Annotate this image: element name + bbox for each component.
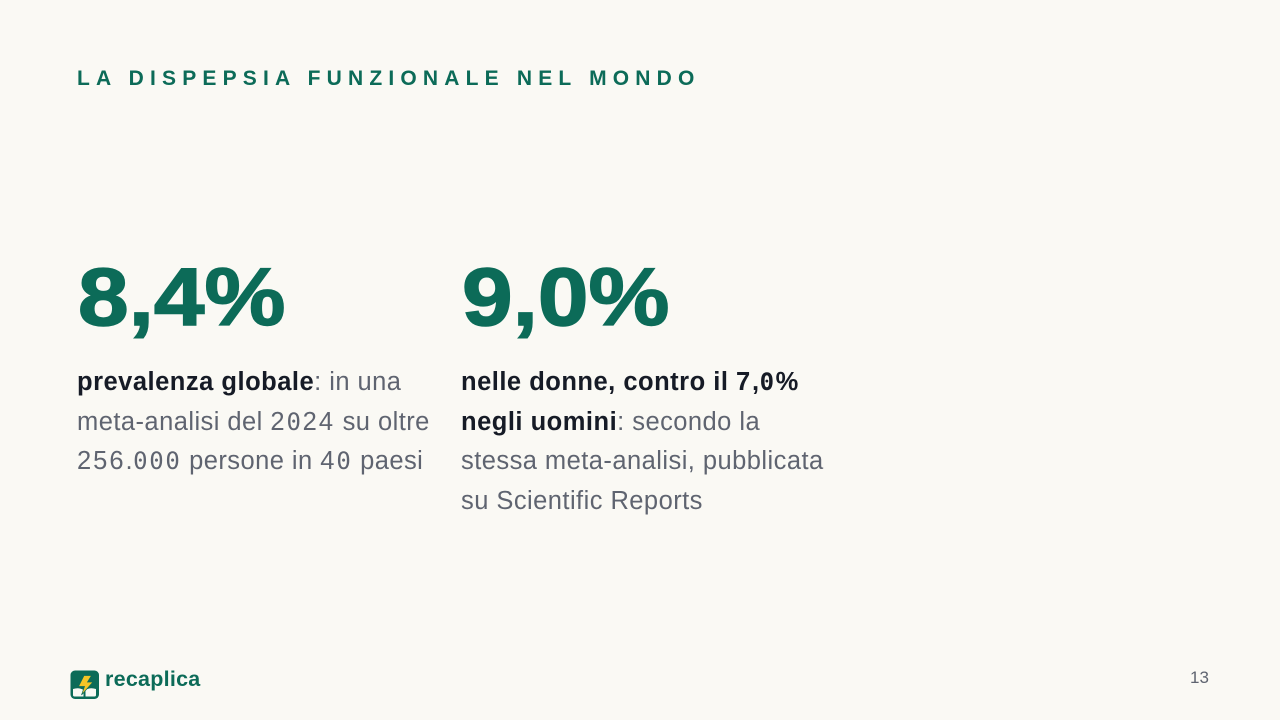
page number: 13 bbox=[1190, 668, 1209, 687]
description: global prevalence bbox=[77, 368, 430, 475]
stat value: 8,4%: 8,4% bbox=[78, 252, 285, 343]
icon: lightning bolt over open book bbox=[70, 670, 99, 699]
description: women versus men: su Scientific Reports bbox=[461, 487, 703, 515]
description: global prevalence: 256.000 persone in 40 paesi bbox=[77, 447, 423, 475]
description: global prevalence: meta-analisi del 2024 su oltre bbox=[77, 408, 430, 436]
description: women versus men: stessa meta-analisi, pubblicata bbox=[461, 447, 824, 475]
description: global prevalence: prevalenza globale: in una bbox=[77, 368, 401, 396]
title: LA DISPEPSIA FUNZIONALE NEL MONDO bbox=[77, 67, 701, 90]
description: women versus men bbox=[461, 368, 824, 515]
brand logo bbox=[70, 667, 200, 699]
stat value: 9,0%: 9,0% bbox=[462, 252, 669, 343]
wordmark: recaplica bbox=[105, 667, 200, 691]
description: women versus men: nelle donne, contro il 7,0% bbox=[461, 368, 799, 396]
stat block: global prevalence bbox=[77, 252, 430, 475]
description: women versus men: negli uomini: secondo la bbox=[461, 408, 760, 436]
stat block: women versus men bbox=[461, 252, 824, 515]
